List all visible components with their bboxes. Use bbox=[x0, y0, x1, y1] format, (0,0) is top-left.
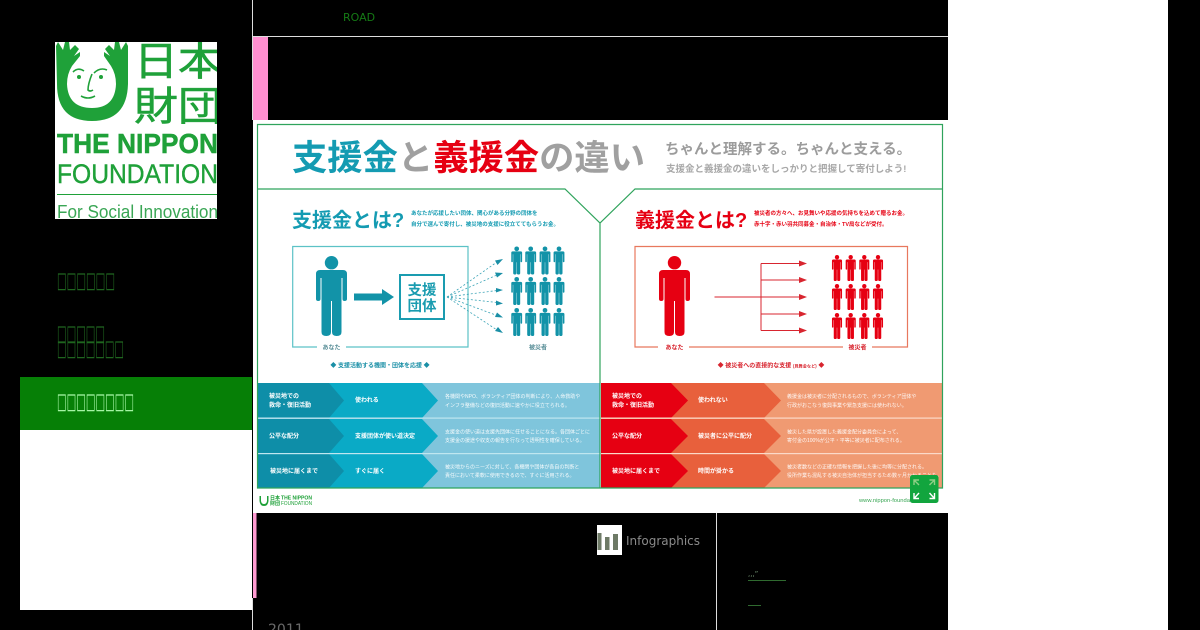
top breadcrumb: ROAD bbox=[343, 11, 375, 24]
right heading: what is 義援金: 赤十字・赤い羽共同募金・自治体・TV局などが受付。 bbox=[754, 220, 888, 228]
subtitle: ちゃんと理解する。ちゃんと支える。 bbox=[665, 141, 911, 158]
label: victims: 被災者 bbox=[848, 344, 867, 352]
row 2: 公平な配分 bbox=[269, 432, 299, 440]
footer small logo: 日本 bbox=[270, 494, 280, 502]
row 1 bbox=[612, 392, 917, 409]
icon: expand button bbox=[910, 475, 938, 503]
row 3: 被災地に届くまで bbox=[612, 467, 660, 475]
row 2: 支援団体が使い道決定 bbox=[355, 432, 415, 440]
right diagram bbox=[635, 246, 908, 370]
row 3: 責任において柔軟に使用できるので、すぐに活用される。 bbox=[445, 472, 575, 479]
logo: The Nippon Foundation bbox=[55, 40, 222, 222]
panel: infographic bbox=[253, 120, 948, 513]
panel: sidebar navigation: □□□□□□□□ bbox=[57, 389, 134, 414]
pink accent top bbox=[253, 37, 268, 120]
icon: victims grid bbox=[511, 246, 564, 336]
logo name: THE NIPPON bbox=[57, 128, 218, 159]
icon: you (red person) bbox=[659, 256, 690, 336]
pink accent bottom bbox=[253, 513, 256, 598]
dashed arrows to victims bbox=[447, 262, 497, 330]
row 2: 被災者に公平に配分 bbox=[698, 432, 752, 440]
subtitle small: 支援金と義援金の違いをしっかりと把握して寄付しよう! bbox=[666, 163, 906, 175]
side links: ,,,” bbox=[748, 570, 758, 578]
comparison table left bbox=[258, 383, 600, 488]
panel: sidebar navigation bbox=[20, 268, 252, 610]
row 3: 被災地に届くまで bbox=[270, 467, 318, 475]
frame lines bbox=[258, 124, 942, 488]
label: you: あなた bbox=[665, 344, 684, 352]
label: victims: 被災者 bbox=[529, 344, 547, 352]
row 2: 支援金の使い道は支援先団体に任せることになる。各団体ごとに bbox=[445, 428, 590, 436]
support organisation box bbox=[400, 275, 444, 319]
logo: The Nippon Foundation: 財団 bbox=[134, 85, 222, 129]
row 1: 被災地での bbox=[612, 392, 642, 400]
main title: 支援金と義援金の違い bbox=[292, 139, 645, 178]
left heading: what is 支援金: あなたが応援したい団体、関心がある分野の団体を bbox=[411, 209, 538, 217]
logo kanji: 日本 bbox=[134, 40, 222, 84]
support organisation box: 団体 bbox=[408, 298, 437, 315]
comparison table right bbox=[601, 383, 942, 488]
support organisation box: 支援 bbox=[408, 282, 437, 299]
arrow: to support organisation bbox=[354, 289, 394, 305]
row 2: 被災した県が設置した義援金配分委員会によって、 bbox=[787, 428, 901, 436]
row 3: 被災地からのニーズに対して、各機関や団体が各自の判断と bbox=[445, 464, 579, 470]
row 2 bbox=[269, 428, 590, 444]
panel: sidebar navigation: □□□□□ bbox=[57, 321, 105, 346]
panel: sidebar navigation: □□□□□□ bbox=[57, 268, 115, 293]
side links bbox=[748, 570, 786, 606]
caption right: ◆ 被災者への直接的な支援 (見舞金など) ◆ bbox=[718, 362, 824, 370]
dashed arrow heads bbox=[495, 259, 503, 333]
logo tagline: For Social Innovation bbox=[57, 202, 218, 222]
row 1: 各機関やNPO、ボランティア団体の判断により、人命救助や bbox=[445, 393, 580, 400]
icon: victims grid bbox=[832, 255, 883, 339]
row 1: インフラ整備などの復旧活動に速やかに役立てられる。 bbox=[445, 402, 570, 409]
row 1: 救命・復旧活動 bbox=[612, 401, 654, 409]
row 1: 被災地での bbox=[269, 392, 299, 400]
icon: infographics badge bbox=[597, 525, 622, 555]
left heading: what is 支援金 bbox=[292, 209, 559, 232]
footer small logo bbox=[260, 494, 312, 507]
row 3: すぐに届く bbox=[355, 468, 385, 475]
left diagram bbox=[293, 246, 564, 370]
row 2: 支援金の援途や収支の報告を行なって透明性を確保している。 bbox=[445, 437, 585, 444]
label: Infographics: Infographics bbox=[626, 533, 700, 548]
footer small logo: 財団 bbox=[270, 500, 280, 507]
right heading: what is 義援金: 義援金とは? bbox=[635, 209, 747, 232]
footer small logo: FOUNDATION bbox=[281, 501, 312, 507]
row 3 bbox=[612, 464, 942, 479]
row 2: 寄付金の100%が公平・平等に被災者に配布される。 bbox=[787, 437, 905, 444]
row 1 bbox=[269, 392, 580, 409]
row 2 bbox=[612, 428, 905, 444]
row 2: 公平な配分 bbox=[612, 432, 642, 440]
icon: you (teal person) bbox=[316, 256, 347, 336]
footer url: www.nippon-foundation.or.jp bbox=[858, 498, 932, 504]
row 1: 義援金は被災者に分配されるもので、ボランティア団体や bbox=[787, 393, 917, 400]
left heading: what is 支援金: 支援金とは? bbox=[292, 209, 404, 232]
right heading: what is 義援金 bbox=[635, 209, 908, 232]
caption left: ◆ 支援活動する機関・団体を応援 ◆ bbox=[330, 362, 430, 370]
row 1: 救命・復旧活動 bbox=[269, 401, 311, 409]
row 1: 使われる bbox=[355, 396, 379, 404]
panel: sidebar navigation: □□□□□□□ bbox=[57, 336, 124, 361]
row 3: 役所作業も混乱する被災自治体が担当するため数ヶ月かかることも。 bbox=[787, 472, 942, 479]
left heading: what is 支援金: 自分で選んで寄付し、被災地の支援に役立ててもらうお金。 bbox=[411, 220, 559, 228]
row 1: 行政がおこなう復興事業や緊急支援には使われない。 bbox=[787, 402, 907, 409]
row 1: 使われない bbox=[698, 396, 728, 404]
footer small logo: THE NIPPON bbox=[281, 496, 312, 502]
arrows: direct to victims bbox=[714, 260, 807, 334]
right heading: what is 義援金: 被災者の方々へ、お見舞いや応援の気持ちを込めて贈るお金。 bbox=[754, 209, 908, 217]
row 3: 被災者数などの正確な情報を把握した後に均等に分配される。 bbox=[787, 464, 927, 470]
row 3: 時間が掛かる bbox=[698, 467, 734, 475]
row 3 bbox=[270, 464, 579, 479]
logo: The Nippon Foundation: FOUNDATION bbox=[57, 159, 218, 189]
label: you: あなた bbox=[322, 344, 341, 352]
logo mark: smiling face with raised hands bbox=[56, 42, 128, 121]
